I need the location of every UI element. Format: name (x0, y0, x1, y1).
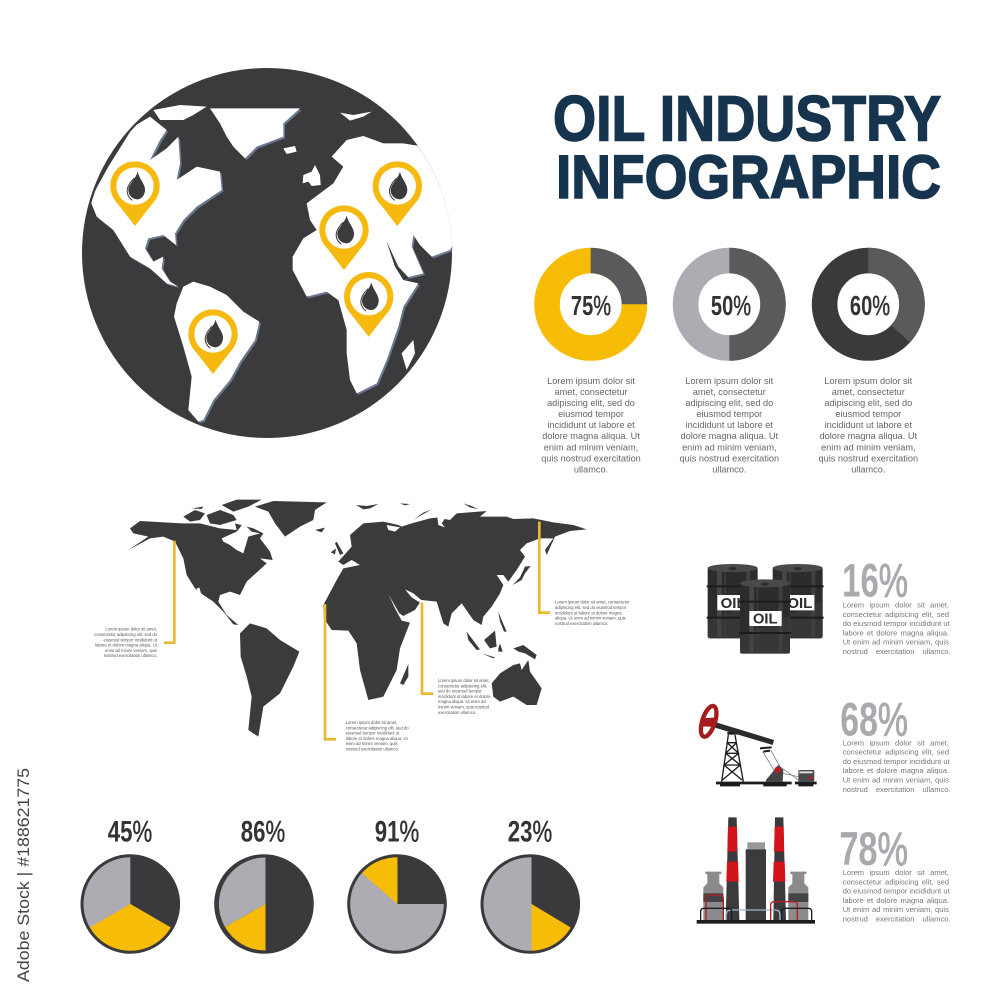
callout text: Africa: eiusmod tempor incididunt ut (346, 731, 400, 736)
world map silhouette (128, 500, 587, 737)
pin: Central Africa (344, 272, 393, 337)
text: donut 75% caption: Lorem ipsum dolor sit (547, 376, 635, 386)
callout text: Middle East: exercitation ullamco. (438, 710, 476, 715)
callout text: Africa: consectetur adipiscing elit, sed do (346, 725, 409, 730)
text: donut 60% caption: eiusmod tempor (835, 409, 901, 419)
callout text: Africa (346, 720, 409, 752)
pie chart: 23%: 23% (508, 814, 552, 848)
text: pump jack description: Ut enim ad minim veniam, quis (843, 776, 949, 784)
callout text: North America: consectetur adipiscing elit, sed do (94, 632, 158, 637)
callout text: Russia: adipiscing elit, sed do eiusmod tempor (555, 605, 627, 610)
callout text: Middle East: Lorem ipsum dolor sit amet, (438, 678, 490, 683)
callout text: North America: enim ad minim veniam, quis (105, 648, 157, 653)
icon: pump jack (698, 704, 817, 786)
globe disc (82, 68, 452, 438)
icon: oil barrels (707, 564, 824, 654)
text: barrels description (843, 600, 951, 656)
callout lines (164, 522, 550, 739)
text: donut 50% caption (680, 376, 779, 474)
donut: 50% (686, 248, 786, 361)
title: INFOGRAPHIC (556, 143, 941, 211)
text: pump jack description: labore et dolore magna aliqua. (843, 766, 949, 775)
text: pump jack description: consectetur adipiscing elit, sed (843, 748, 949, 757)
stat: 68%: 68% (840, 693, 908, 746)
text: donut 50% caption: incididunt ut labore et (686, 420, 773, 430)
text: donut 75% caption: adipiscing elit, sed do (547, 398, 635, 408)
text: donut 60% caption: Lorem ipsum dolor sit (824, 376, 913, 386)
callout text: Africa: labore et dolore magna aliqua. Ut (346, 736, 408, 741)
callout text: Middle East: magna aliqua. Ut enim ad (438, 699, 486, 704)
pie chart: 91%: 91% (375, 814, 419, 848)
panel: flat world map with callouts (94, 500, 630, 752)
callout text: North America (94, 627, 158, 658)
text: pump jack description: nostrud exercitation ullamco. (843, 785, 951, 794)
stat: 78%: 78% (839, 823, 908, 875)
text: barrels description: Ut enim ad minim veniam, quis (843, 638, 949, 647)
text: donut 60% caption: quis nostrud exercitation (819, 453, 918, 463)
text: donut 50% caption: eiusmod tempor (696, 409, 762, 419)
callout text: Middle East: sed do eiusmod tempor (438, 689, 482, 694)
text: donut 75% caption: enim ad minim veniam, (544, 442, 638, 452)
text: donut 50% caption: amet, consectetur (693, 387, 766, 397)
text: pump jack description: Lorem ipsum dolor sit amet, (843, 738, 949, 747)
text: donut 50% caption: enim ad minim veniam, (682, 442, 777, 452)
text: barrels description: nostrud exercitation ullamco. (843, 647, 951, 656)
pie chart: 86%: 86% (241, 814, 285, 848)
globe continents (90, 105, 465, 423)
text: refinery description: nostrud exercitation ullamco. (843, 914, 951, 924)
stat: 16%: 16% (842, 554, 908, 607)
callout text: North America: Lorem ipsum dolor sit amet, (105, 627, 157, 632)
text: donut 75% caption: eiusmod tempor (558, 409, 624, 419)
text: donut 50% caption: ullamco. (712, 464, 746, 474)
text: barrels description: do eiusmod tempor incididunt ut (843, 619, 951, 628)
text: donut 60% caption: adipiscing elit, sed do (824, 398, 912, 408)
donut: 75% (547, 248, 647, 348)
text: donut 50% caption: Lorem ipsum dolor sit (685, 376, 774, 386)
text: donut 50% caption: dolore magna aliqua. Ut (681, 431, 779, 441)
pin: North Africa (319, 205, 369, 270)
callout text: Africa: Lorem ipsum dolor sit amet, (346, 720, 397, 725)
text: refinery description (843, 868, 951, 924)
icon: oil barrels: OIL (787, 595, 812, 612)
title (553, 82, 941, 211)
pie chart: 45% (82, 814, 179, 952)
donut: 60%: 60% (850, 291, 890, 322)
pie chart: 23% (482, 814, 579, 952)
text: barrels description: labore et dolore magna aliqua. (843, 628, 949, 637)
text: donut 75% caption: quis nostrud exercitation (541, 453, 641, 463)
text: donut 60% caption: amet, consectetur (832, 387, 905, 397)
text: donut 75% caption: amet, consectetur (554, 387, 628, 397)
pie chart: 91% (349, 814, 445, 952)
icon: oil barrels: OIL (721, 595, 746, 612)
text: barrels description: Lorem ipsum dolor sit amet, (843, 600, 949, 610)
callout text: Russia (555, 600, 630, 626)
text: donut 75% caption: incididunt ut labore et (547, 420, 635, 430)
callout text: North America: eiusmod tempor incididunt ut (103, 637, 158, 642)
title: OIL INDUSTRY (553, 82, 941, 154)
text: donut 50% caption: adipiscing elit, sed do (685, 398, 773, 408)
callout text: Africa: nostrud exercitation ullamco. (346, 746, 399, 752)
pin: South America (188, 309, 238, 374)
text: refinery description: Ut enim ad minim veniam, quis (843, 905, 949, 914)
donut: 50%: 50% (711, 291, 751, 322)
callout text: North America: labore et dolore magna aliqua. Ut (95, 643, 158, 648)
callout text: Middle East: consectetur adipiscing elit, (438, 683, 487, 688)
text: donut 60% caption: incididunt ut labore et (825, 420, 912, 430)
callout text: Middle East: minim veniam, quis nostrud (438, 704, 490, 710)
pie chart: 86% (216, 814, 312, 952)
text: donut 75% caption (541, 376, 641, 474)
icon: refinery (697, 817, 815, 924)
panel: globe with oil pins (82, 68, 465, 438)
pin: North America (110, 161, 160, 226)
donut: 60% (825, 248, 925, 348)
text: donut 50% caption: quis nostrud exercitation (680, 453, 779, 463)
text: refinery description: consectetur adipiscing elit, sed (843, 877, 949, 886)
callout text: North America: nostrud exercitation ullamco. (104, 653, 157, 658)
text: donut 75% caption: ullamco. (574, 464, 608, 474)
text: donut 75% caption: dolore magna aliqua. Ut (542, 431, 640, 441)
callout text: Middle East (438, 678, 491, 715)
icon: oil barrels: OIL (753, 612, 777, 628)
callout text: Middle East: incididunt ut labore et dolore (438, 694, 491, 699)
callout text: Russia: nostrud exercitation ullamco. (555, 621, 608, 626)
text: donut 60% caption: enim ad minim veniam, (821, 442, 916, 452)
text: refinery description: Lorem ipsum dolor sit amet, (843, 868, 949, 877)
text: donut 60% caption: dolore magna aliqua. Ut (820, 431, 918, 441)
text: barrels description: consectetur adipiscing elit, sed (843, 610, 949, 619)
text: pump jack description: do eiusmod tempor incididunt ut (843, 757, 951, 766)
callout text: Russia: Lorem ipsum dolor sit amet, consectetur (555, 600, 630, 605)
callout text: Russia: incididunt ut labore et dolore magna (555, 610, 622, 615)
callout text: Africa: enim ad minim veniam, quis (346, 741, 398, 746)
stock id text: Adobe Stock | #188621775 (14, 768, 33, 982)
callout text: Russia: aliqua. Ut enim ad minim veniam, quis (555, 616, 626, 621)
text: donut 60% caption: ullamco. (851, 464, 885, 474)
pin: Asia (373, 161, 422, 226)
text: pump jack description (843, 738, 951, 794)
text: donut 60% caption (819, 376, 918, 474)
donut: 75%: 75% (571, 291, 611, 322)
text: refinery description: labore et dolore magna aliqua. (843, 896, 949, 905)
pie chart: 45%: 45% (108, 814, 152, 848)
text: refinery description: do eiusmod tempor incididunt ut (843, 887, 951, 896)
